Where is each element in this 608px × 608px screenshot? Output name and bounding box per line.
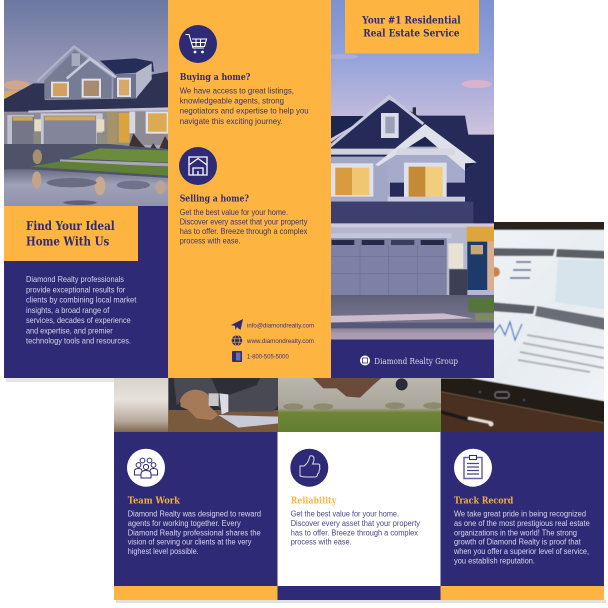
heading box: Your #1 Residential xyxy=(361,14,461,26)
text: track record body: We take great pride in being recognized xyxy=(454,510,586,519)
text: buying body: negotiators and expertise to help you xyxy=(180,106,309,116)
text: intro: Diamond Realty professionals xyxy=(26,274,124,284)
photo: handshake over lawn xyxy=(278,378,441,432)
contact: website xyxy=(232,335,314,346)
text: team work body: Diamond Realty was designed to reward xyxy=(128,510,261,519)
text: selling body xyxy=(180,207,308,245)
text: reliability body: has to offer. Breeze through a complex xyxy=(291,528,418,537)
heading box xyxy=(345,0,479,54)
text: intro: provide exceptional results for xyxy=(26,284,126,294)
title box xyxy=(4,206,138,261)
heading: selling a home: Selling a home? xyxy=(180,194,249,205)
text: team work body: agents for working together. Every xyxy=(128,519,241,528)
back panel: reliability xyxy=(278,432,440,600)
heading box: Real Estate Service xyxy=(363,28,460,40)
text: track record body xyxy=(453,510,590,565)
heading: team work: Team Work xyxy=(128,495,180,506)
text: buying body xyxy=(180,85,309,126)
photo: house at dusk xyxy=(0,0,173,213)
front panel: right xyxy=(325,0,500,378)
heading: buying a home: Buying a home? xyxy=(180,72,251,83)
heading: track record: Track Record xyxy=(454,495,514,506)
text: buying body: knowledgeable agents, strong xyxy=(180,96,284,106)
photo: house front xyxy=(325,0,500,347)
text: team work body xyxy=(128,510,261,556)
icon: logo xyxy=(360,356,370,366)
icon: house xyxy=(179,147,217,185)
text: track record body: when you offer a superior level of service, xyxy=(453,547,589,556)
text: track record body: growth of Diamond Realty is proof that xyxy=(454,538,581,547)
text: intro: insights, a broad range of xyxy=(26,305,110,315)
text: buying body: navigate this exciting journey. xyxy=(180,116,283,126)
icon: team xyxy=(127,449,165,487)
contact: email xyxy=(231,319,314,330)
icon: thumbs up xyxy=(290,449,328,487)
footer brand bar xyxy=(331,340,494,378)
page shadows xyxy=(6,378,606,603)
text: intro: services, decades of experience xyxy=(26,315,131,325)
contact: phone: 1-800-505-5000 xyxy=(247,354,289,360)
title box: Find Your Ideal xyxy=(26,218,115,233)
photo: tablet with analytics xyxy=(435,215,608,432)
front panel: left xyxy=(0,0,173,378)
text: reliability body: Get the best value for your home. xyxy=(291,510,399,519)
text: team work body: highest level possible. xyxy=(128,547,199,556)
text: intro: technology tools and resources. xyxy=(26,336,131,346)
photo: businessman at desk xyxy=(168,378,278,432)
text: team work body: vision of serving our clients at the very xyxy=(128,538,251,547)
text: selling body: process with ease. xyxy=(180,235,241,245)
panel background xyxy=(4,206,168,378)
text: selling body: Get the best value for your home. xyxy=(180,207,288,217)
text: intro: clients by combining local market xyxy=(26,295,137,305)
text: track record body: organizations in the world! The strong xyxy=(454,528,577,537)
photo: laptop xyxy=(114,378,169,432)
text: intro xyxy=(26,274,137,346)
text: intro: and expertise, and premier xyxy=(26,325,113,335)
text: track record body: as one of the most prestigious real estate xyxy=(454,519,590,528)
title box: Home With Us xyxy=(26,233,109,248)
text: reliability body xyxy=(291,510,420,547)
front panel: middle xyxy=(168,0,331,378)
back panel: track record xyxy=(440,432,604,600)
back panel: team work xyxy=(114,432,278,600)
brand name: Diamond Realty Group xyxy=(374,357,458,367)
text: reliability body: Discover every asset that your property xyxy=(291,519,420,528)
icon: clipboard xyxy=(454,449,492,487)
text: buying body: We have access to great listings, xyxy=(180,85,294,95)
text: team work body: Diamond Realty professional shares the xyxy=(128,528,261,537)
text: track record body: you establish reputation. xyxy=(454,556,535,565)
contact: phone xyxy=(232,351,289,362)
heading: reliability: Reliability xyxy=(291,495,337,506)
icon: shopping cart xyxy=(179,25,217,63)
contact: email: info@diamondrealty.com xyxy=(247,322,314,330)
contact: website: www.diamondrealty.com xyxy=(246,338,314,345)
back page: photo strip xyxy=(114,215,608,437)
text: selling body: has to offer. Breeze through a complex xyxy=(180,226,308,236)
text: selling body: Discover every asset that your property xyxy=(180,216,308,226)
text: reliability body: process with ease. xyxy=(291,538,352,547)
